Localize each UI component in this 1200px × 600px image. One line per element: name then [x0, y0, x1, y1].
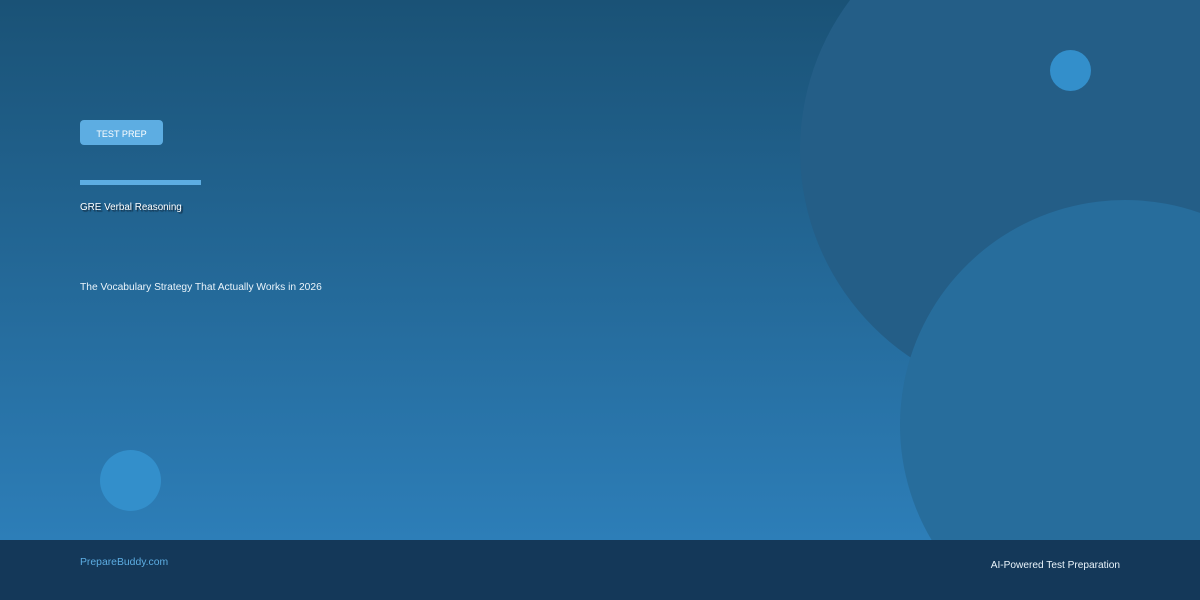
- footer brand: PrepareBuddy.com: [80, 557, 168, 568]
- title: GRE Verbal Reasoning: [80, 202, 182, 213]
- small circle top right: [1050, 50, 1091, 91]
- badge: test prep: [80, 120, 163, 145]
- footer tagline: AI-Powered Test Preparation: [991, 560, 1120, 571]
- subtitle: The Vocabulary Strategy That Actually Works in 2026: [80, 282, 322, 293]
- large circle top right: [800, 0, 1200, 400]
- footer bar: [0, 540, 1200, 600]
- small circle bottom left: [100, 450, 161, 511]
- large circle bottom right: [900, 200, 1200, 540]
- accent bar: [80, 180, 201, 185]
- badge: test prep: TEST PREP: [96, 129, 147, 139]
